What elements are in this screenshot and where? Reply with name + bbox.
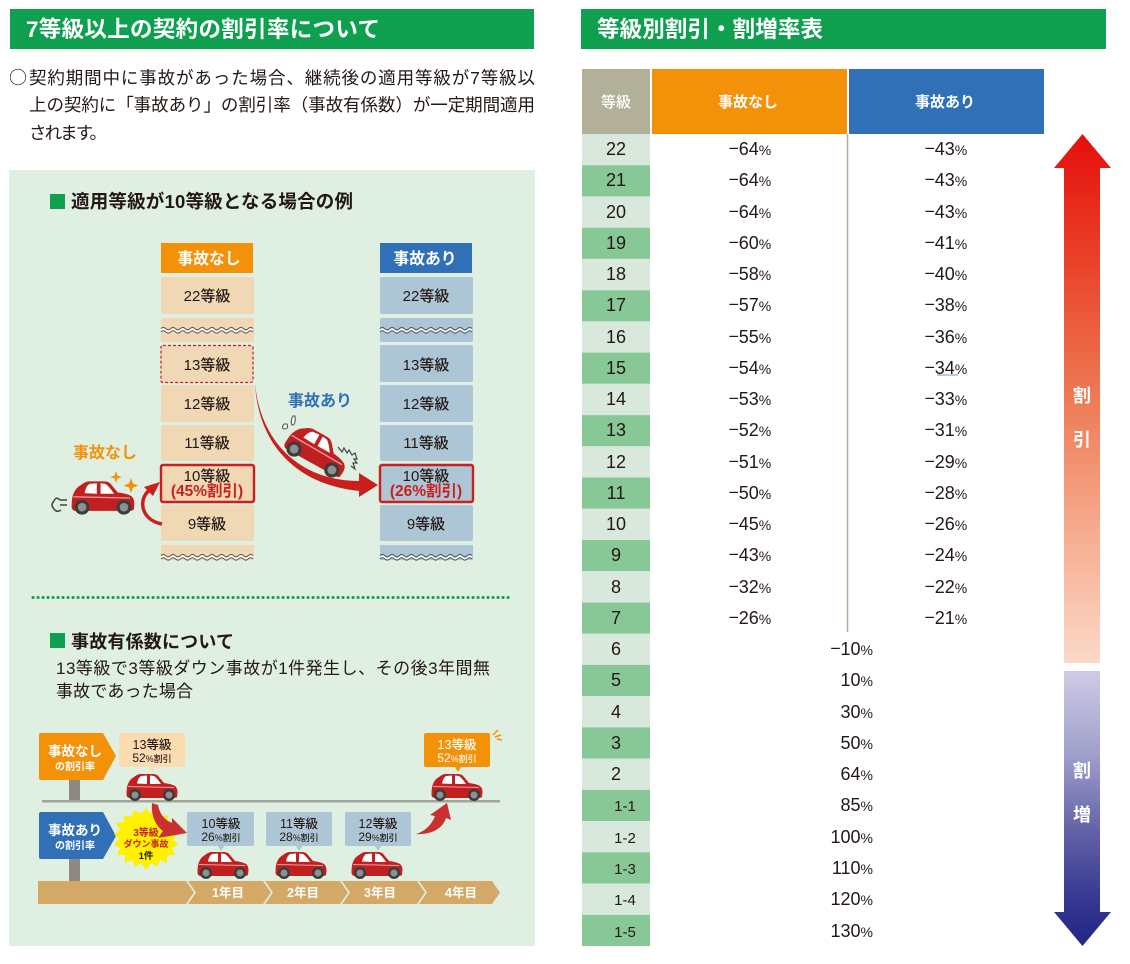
intro text block: 上の契約に「事故あり」の割引率（事故有係数）が一定期間適用 — [29, 95, 535, 115]
grade labels: 14 — [606, 389, 626, 409]
signpost: accident rate: 事故あり — [48, 822, 102, 838]
no accident rates: −26% — [729, 604, 771, 630]
no accident rates: −53% — [729, 385, 771, 411]
grade labels: 6 — [611, 639, 621, 659]
column: accident grades: 事故あり — [393, 249, 457, 268]
arrow: drop down three grades — [152, 803, 187, 838]
signpost: no accident rate: の割引率 — [55, 760, 95, 773]
accident rates: −22% — [925, 573, 967, 599]
no accident rates: −64% — [729, 166, 771, 192]
callout: year 2 grade 11: 28%割引 — [279, 830, 319, 844]
panel: green example background — [9, 170, 535, 946]
grade labels: 10 — [606, 514, 626, 534]
year timeline bar: 2年目 — [287, 885, 319, 900]
accident rates: −33% — [925, 385, 967, 411]
table header row — [582, 69, 1044, 134]
shared rates for grades 6 and below: 110% — [832, 858, 873, 878]
shared rates for grades 6 and below: 64% — [841, 764, 873, 784]
grade labels: 7 — [611, 608, 621, 628]
shared rates for grades 6 and below: 85% — [841, 795, 873, 815]
shared rates for grades 6 and below: −10% — [831, 635, 873, 661]
grade labels: 4 — [611, 702, 621, 722]
no accident rates: −50% — [729, 479, 771, 505]
grade labels: 1-4 — [614, 892, 636, 909]
arrow: grade up one step — [143, 482, 162, 524]
grade labels: 20 — [606, 202, 626, 222]
left section heading bar — [10, 9, 534, 49]
column: accident grades: 9等級 — [407, 515, 445, 533]
accident rates: −28% — [925, 479, 967, 505]
badge: three grade down accident: ダウン事故 — [123, 838, 169, 849]
grade labels: 13 — [606, 420, 626, 440]
table header row: 事故なし — [718, 93, 778, 111]
shared rates for grades 6 and below — [830, 635, 873, 941]
right section heading bar — [581, 9, 1106, 49]
accident rates: −38% — [925, 291, 967, 317]
year timeline bar — [38, 881, 500, 904]
no accident rates: −51% — [729, 448, 771, 474]
grade labels: 1-2 — [614, 830, 636, 847]
no accident rates: −55% — [729, 323, 771, 349]
callout: year 1 grade 10 — [187, 812, 254, 879]
badge: three grade down accident: 1件 — [139, 850, 154, 862]
arrow: discount: 割 — [1073, 386, 1091, 406]
intro text block — [9, 64, 535, 143]
grade labels: 2 — [611, 764, 621, 784]
column: no accident grades: 10等級 — [184, 467, 230, 485]
arrow: surcharge — [1054, 671, 1111, 946]
grade labels: 16 — [606, 327, 626, 347]
no accident rates: −54% — [729, 354, 771, 380]
no accident rates: −60% — [729, 229, 771, 255]
callout: year 3 grade 12: 29%割引 — [358, 830, 398, 844]
callout: start grade 13 with car: 13等級 — [133, 737, 172, 752]
intro text block: されます。 — [29, 123, 107, 143]
accident rates: −41% — [925, 229, 967, 255]
no accident rates: −43% — [729, 541, 771, 567]
column: accident grades: 10等級 — [403, 467, 449, 485]
column: no accident grades: 12等級 — [184, 395, 230, 413]
column: accident grades: 22等級 — [403, 287, 449, 305]
column: accident grades: 13等級 — [403, 356, 449, 374]
heading: grade 10 example: 適用等級が10等級となる場合の例 — [71, 191, 353, 212]
grade labels: 8 — [611, 577, 621, 597]
no accident rates — [729, 135, 771, 630]
accident rates: −21% — [925, 604, 967, 630]
grade labels: 5 — [611, 670, 621, 690]
no accident rates: −64% — [729, 135, 771, 161]
label: accident: 事故あり — [288, 391, 352, 410]
column: accident grades: 12等級 — [403, 395, 449, 413]
column: no accident grades: 13等級 — [184, 356, 230, 374]
table: discount rates by grade — [582, 69, 1044, 946]
shared rates for grades 6 and below: 50% — [841, 733, 873, 753]
grade labels — [606, 139, 636, 941]
accident rates: −24% — [925, 541, 967, 567]
accident rates: −43% — [925, 135, 967, 161]
shared rates for grades 6 and below: 130% — [830, 921, 873, 941]
grade labels: 3 — [611, 733, 621, 753]
arrow: recover to grade 13 — [416, 803, 451, 834]
accident rates: −43% — [925, 198, 967, 224]
badge: three grade down accident — [114, 808, 178, 870]
timeline road line — [42, 800, 500, 802]
column: no accident grades: 9等級 — [188, 515, 226, 533]
grade labels: 17 — [606, 295, 626, 315]
year timeline bar: 1年目 — [212, 885, 244, 900]
signpost: no accident rate: 事故なし — [48, 743, 102, 759]
right section heading bar: 等級別割引・割増率表 — [597, 17, 823, 42]
arrow: surcharge: 割 — [1073, 761, 1091, 781]
arrow: discount — [1054, 134, 1111, 663]
callout: year 1 grade 10: 10等級 — [202, 816, 241, 831]
accident rates: −43% — [925, 166, 967, 192]
grade labels: 1-5 — [614, 924, 636, 941]
no accident rates: −32% — [729, 573, 771, 599]
accident rates: −34% — [925, 354, 967, 380]
arrow: discount: 引 — [1073, 430, 1091, 450]
coefficient description text: 13等級で3等級ダウン事故が1件発生し、その後3年間無 — [56, 659, 490, 678]
shared rates for grades 6 and below: 10% — [841, 670, 873, 690]
grade labels: 12 — [606, 452, 626, 472]
grade labels: 9 — [611, 545, 621, 565]
signpost: no accident rate — [39, 733, 116, 801]
grade labels: 1-1 — [614, 798, 636, 815]
shared rates for grades 6 and below: 120% — [830, 889, 873, 909]
icon: car driving with sparkles — [52, 471, 138, 515]
column: no accident grades: (45%割引) — [171, 482, 243, 500]
left section heading bar: 7等級以上の契約の割引率について — [26, 17, 380, 42]
intro text block: ○ — [9, 64, 27, 90]
callout: start grade 13 with car: 52%割引 — [132, 751, 172, 765]
grade labels: 21 — [606, 170, 626, 190]
heading: accident coefficient: 事故有係数について — [71, 632, 234, 652]
callout: year 2 grade 11 — [266, 812, 332, 879]
signpost: accident rate — [39, 812, 116, 881]
callout: year 4 back to grade 13: 13等級 — [438, 737, 477, 752]
arrow: surcharge: 増 — [1073, 805, 1091, 825]
callout: year 4 back to grade 13: 52%割引 — [437, 751, 477, 765]
grade labels: 22 — [606, 139, 626, 159]
column: accident grades: (26%割引) — [390, 482, 462, 500]
callout: year 3 grade 12 — [345, 812, 411, 879]
accident rates: −40% — [925, 260, 967, 286]
intro text block: 契約期間中に事故があった場合、継続後の適用等級が7等級以 — [29, 68, 535, 88]
callout: start grade 13 with car — [119, 733, 185, 801]
no accident rates: −58% — [729, 260, 771, 286]
accident rates — [925, 135, 967, 630]
callout: year 1 grade 10: 26%割引 — [201, 830, 241, 844]
signpost: accident rate: の割引率 — [55, 839, 95, 852]
column: accident grades: 11等級 — [403, 434, 449, 452]
grade column stripes — [582, 134, 650, 946]
icon: car skidding — [281, 416, 357, 482]
grade labels: 11 — [607, 483, 625, 503]
table header row: 等級 — [601, 93, 631, 111]
shared rates for grades 6 and below: 30% — [841, 702, 873, 722]
table header row: 事故あり — [915, 93, 975, 111]
column: no accident grades: 事故なし — [177, 249, 241, 268]
shared rates for grades 6 and below: 100% — [830, 827, 873, 847]
column: no accident grades: 11等級 — [184, 434, 230, 452]
callout: year 3 grade 12: 12等級 — [359, 816, 398, 831]
column: accident grades — [380, 243, 473, 560]
coefficient description text: 事故であった場合 — [56, 682, 193, 701]
accident rates: −29% — [925, 448, 967, 474]
column: no accident grades: 22等級 — [184, 287, 230, 305]
year timeline bar: 4年目 — [445, 885, 477, 900]
column: no accident grades — [161, 243, 254, 560]
grade labels: 19 — [606, 233, 626, 253]
no accident rates: −57% — [729, 291, 771, 317]
grade labels: 1-3 — [614, 861, 636, 878]
label: no accident: 事故なし — [73, 443, 137, 462]
arrow: accident drop from 13 to 10 — [255, 383, 378, 497]
coefficient description text — [56, 659, 490, 701]
grade labels: 18 — [606, 264, 626, 284]
grade labels: 15 — [606, 358, 626, 378]
no accident rates: −64% — [729, 198, 771, 224]
callout: year 2 grade 11: 11等級 — [280, 816, 318, 831]
no accident rates: −52% — [729, 416, 771, 442]
year timeline bar: 3年目 — [364, 885, 396, 900]
callout: year 4 back to grade 13 — [424, 730, 502, 801]
accident rates: −31% — [925, 416, 967, 442]
accident rates: −26% — [925, 510, 967, 536]
no accident rates: −45% — [729, 510, 771, 536]
badge: three grade down accident: 3等級 — [133, 826, 159, 839]
accident rates: −36% — [925, 323, 967, 349]
